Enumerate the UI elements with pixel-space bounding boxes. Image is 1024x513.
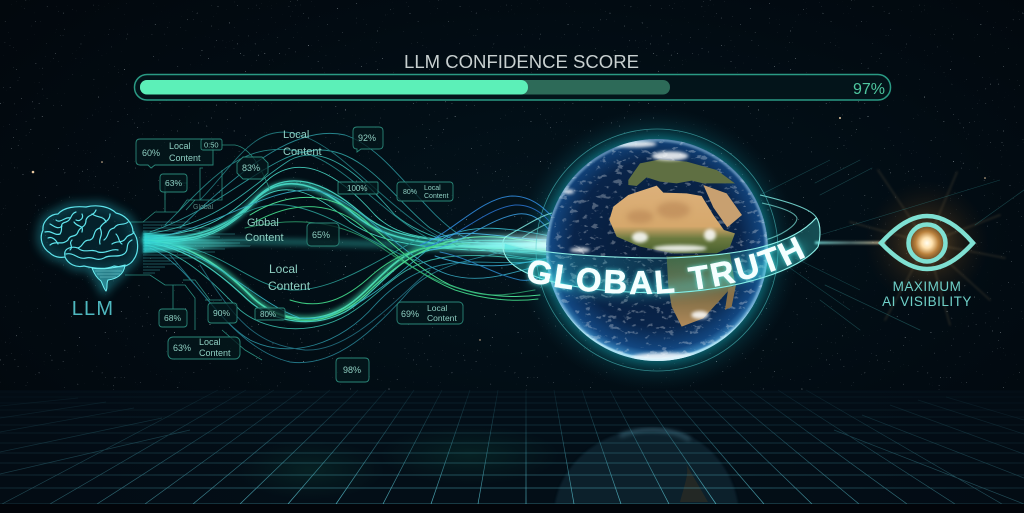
- brain glow: [41, 206, 138, 290]
- heading: GLOBAL TRUTH: GLOBAL TRUTH: [528, 236, 806, 294]
- bar: primary segment: [140, 80, 528, 94]
- callout: 80% local content: Local: [424, 185, 441, 192]
- score value: 97%: [853, 81, 885, 98]
- band edges: [503, 217, 820, 293]
- label: maximum AI visibility: AI VISIBILITY: [882, 294, 972, 309]
- circuit traces from brain: [125, 145, 270, 360]
- callout: 80%: 80%: [260, 310, 276, 319]
- perspective grid floor: [0, 390, 1024, 504]
- callout: small tag: [201, 139, 222, 150]
- heading: GLOBAL TRUTH glow: GLOBAL TRUTH: [524, 234, 807, 297]
- text: tiny global tag: Global: [193, 204, 214, 211]
- callout: 69% local content: Local: [427, 303, 447, 313]
- teal stream lines: [145, 132, 560, 363]
- cerebellum: [92, 265, 125, 291]
- callout: 100%: [338, 182, 378, 194]
- text: local content middle: [268, 262, 311, 293]
- callout: 69% local content: [397, 302, 463, 324]
- callout: 80% local content: 80%: [403, 189, 417, 196]
- callout: 60% local content: Local: [169, 141, 191, 151]
- callout: 63% local content: Local: [199, 337, 221, 347]
- callout: 63%: 63%: [165, 178, 182, 188]
- label: maximum AI visibility: MAXIMUM: [893, 279, 961, 294]
- callout: 69% local content: 69%: [401, 309, 419, 319]
- star field: [0, 0, 1024, 400]
- callout: 63%: [160, 174, 187, 192]
- text: local content top: Content: [283, 146, 322, 158]
- callout: 68%: 68%: [164, 313, 181, 323]
- label: maximum AI visibility: [882, 279, 972, 309]
- callout: 65%: [307, 223, 339, 246]
- callout: 98%: 98%: [343, 365, 361, 375]
- callout: 63% local content: 63%: [173, 343, 191, 353]
- ocean cloud texture: [546, 139, 768, 358]
- text: global content: Global: [247, 217, 279, 229]
- label: LLM: LLM: [72, 298, 114, 320]
- callout: 69% local content: Content: [427, 313, 457, 323]
- confidence score bar: [134, 74, 890, 100]
- icon: brain: [41, 206, 138, 291]
- callout: 63% local content: Content: [199, 348, 231, 358]
- callout: 98%: [336, 358, 369, 382]
- text: global content: [245, 217, 284, 244]
- beam from globe to eye: [760, 160, 1000, 310]
- brain outline and folds: [41, 206, 138, 268]
- text: local content top: Local: [283, 129, 309, 141]
- callout: 92%: [353, 127, 383, 152]
- callout: 83%: [237, 157, 268, 179]
- callout: 60% local content: [136, 139, 213, 168]
- stream glow: [145, 184, 560, 318]
- eye light rays: [815, 160, 1024, 330]
- globe: [536, 129, 778, 371]
- callout: 90%: 90%: [213, 308, 230, 318]
- continents: [562, 141, 742, 362]
- callout: 60% local content: 60%: [142, 148, 160, 158]
- callout: 80%: [255, 308, 285, 320]
- callout: 100%: 100%: [347, 184, 367, 193]
- callout: 92%: 92%: [358, 133, 376, 143]
- grid edge fades: [0, 390, 300, 504]
- globe ring back half: [507, 195, 816, 240]
- callout: 80% local content: [397, 182, 453, 201]
- green stream lines: [245, 197, 555, 320]
- bar: secondary segment: [140, 80, 670, 94]
- callout: 68%: [159, 309, 187, 327]
- band fill: [505, 218, 820, 293]
- Global Truth ring band: [502, 216, 821, 302]
- callout: 80% local content: Content: [424, 193, 449, 200]
- callout: small tag: 0:50: [204, 140, 219, 150]
- text: local content middle: Content: [268, 279, 311, 293]
- globe halo: [515, 108, 799, 392]
- data streams from brain to globe: [143, 132, 560, 363]
- title: LLM CONFIDENCE SCORE: [404, 52, 639, 72]
- converging beam from brain: [143, 232, 250, 253]
- blue stream lines: [420, 196, 560, 280]
- bright stars: [32, 117, 986, 341]
- globe reflection: [555, 428, 738, 504]
- icon: eye: [881, 216, 973, 269]
- ring light bloom: [530, 245, 805, 291]
- text: local content top: [283, 129, 322, 158]
- text: global content: Content: [245, 232, 284, 244]
- callout: 90%: [208, 303, 237, 323]
- callout: 63% local content: [168, 337, 240, 359]
- callout: 83%: 83%: [242, 163, 260, 173]
- text: local content middle: Local: [269, 262, 298, 276]
- beam entering globe: [430, 236, 565, 252]
- callout: 60% local content: Content: [169, 153, 201, 163]
- cloud blobs: [562, 141, 716, 362]
- callout: 65%: 65%: [312, 230, 330, 240]
